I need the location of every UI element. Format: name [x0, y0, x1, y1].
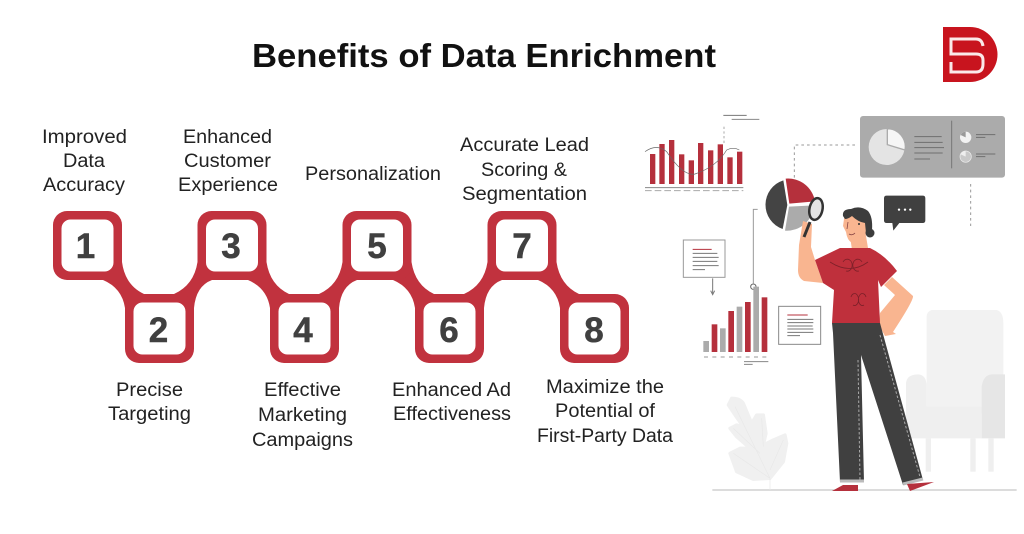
label 6: Enhanced Ad: [392, 380, 511, 401]
label 2: Targeting: [108, 404, 191, 425]
label 8: [537, 377, 673, 447]
label 7: Segmentation: [462, 184, 587, 205]
document right: [779, 306, 821, 344]
step 8: 8: [584, 311, 604, 350]
person: [798, 197, 934, 491]
label 3: Enhanced: [183, 127, 272, 148]
label 4: Marketing: [258, 405, 347, 426]
label 7: [460, 135, 589, 205]
step 1: [53, 211, 122, 280]
plant: [728, 398, 787, 490]
neck and head: [843, 207, 874, 252]
step labels: [42, 127, 673, 451]
arm on hip: [879, 277, 913, 336]
label 1: Accuracy: [43, 175, 126, 196]
label 4: Effective: [264, 380, 341, 401]
label 6: Effectiveness: [393, 404, 511, 425]
step 6: [415, 294, 484, 363]
label 4: Campaigns: [252, 430, 353, 451]
icon: pie under magnifier: [765, 179, 815, 231]
label 8: Maximize the: [546, 377, 664, 398]
document left: [683, 240, 725, 295]
step 3: 3: [221, 227, 241, 266]
label 2: Precise: [116, 380, 183, 401]
step 2: 2: [149, 311, 168, 350]
step 1: 1: [76, 227, 95, 266]
label 1: Improved: [42, 127, 127, 148]
step 4: 4: [293, 311, 313, 350]
step 3: [198, 211, 266, 280]
label 7: Accurate Lead: [460, 135, 589, 156]
step 2: [125, 294, 194, 363]
illustration upper: charts and panel: [645, 115, 1005, 295]
label 3: [178, 127, 278, 196]
step 7: 7: [512, 227, 532, 266]
label 3: Experience: [178, 175, 278, 196]
label 1: Data: [63, 151, 105, 172]
shirt: [815, 248, 897, 323]
label 1: [42, 127, 127, 196]
label 7: Scoring &: [481, 160, 567, 181]
bar chart bottom: [703, 287, 768, 364]
dashboard panel: [860, 116, 1005, 178]
step track: [53, 211, 629, 363]
pants: [832, 323, 923, 485]
step 4: [270, 294, 339, 363]
illustration lower: chart and furniture: [703, 287, 1017, 490]
label 6: [392, 380, 511, 425]
dashed connectors: [794, 145, 971, 226]
label 8: Potential of: [555, 401, 656, 422]
armchair: [906, 310, 1005, 472]
bar chart top: [645, 115, 759, 191]
step 5: [342, 211, 412, 280]
label 2: [108, 380, 191, 425]
step 5: 5: [367, 227, 387, 266]
label 5: Personalization: [305, 164, 441, 185]
step 8: [560, 294, 629, 363]
ground line: [712, 488, 1017, 492]
title: Benefits of Data Enrichment: [252, 37, 716, 74]
magnifier: [804, 197, 825, 237]
illustration: [645, 115, 1017, 491]
icon: company logo: [943, 27, 998, 82]
pointer line: [751, 209, 758, 289]
step 6: 6: [439, 311, 459, 350]
arm raised: [798, 221, 823, 283]
label 3: Customer: [184, 151, 272, 172]
step 7: [488, 211, 556, 280]
shoes: [832, 482, 934, 491]
speech bubble: [884, 196, 925, 231]
label 4: [252, 380, 353, 451]
label 8: First-Party Data: [537, 426, 673, 447]
